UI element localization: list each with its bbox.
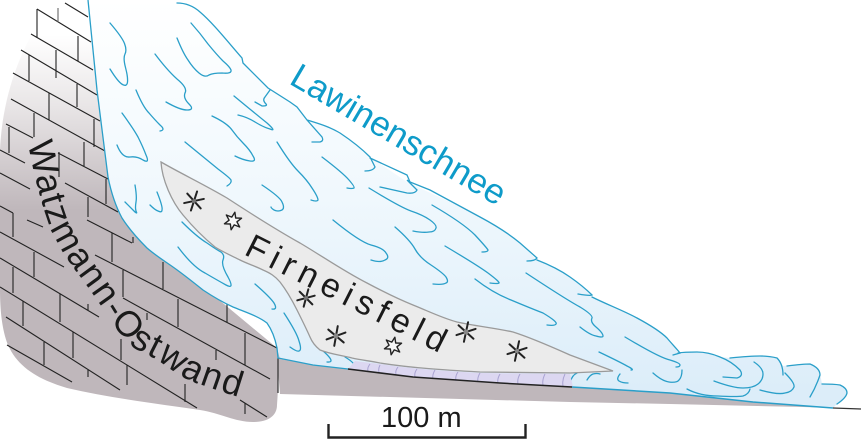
- label: Watzmann-Ostwand: Watzmann-Ostwand: [29, 138, 244, 396]
- snow flow lines: [110, 23, 794, 396]
- scale bar label: 100 m: [381, 402, 462, 434]
- star 7: [506, 339, 528, 363]
- label: Firneisfeld: Firneisfeld: [239, 227, 453, 360]
- snow left outline along the rock: [88, 0, 348, 369]
- star 5: [383, 336, 403, 356]
- basal ice layer: [348, 361, 573, 387]
- brick courses: [0, 3, 277, 417]
- scale bar line: [328, 424, 526, 438]
- base of avalanche snow outline: [572, 387, 833, 408]
- distal ground line: [833, 408, 861, 409]
- avalanche surface outline strokes: [177, 3, 847, 404]
- rock body: [0, 0, 280, 422]
- ground wedge below the snow: [277, 358, 833, 408]
- rock wall: Watzmann-Ostwand: [0, 0, 280, 422]
- scale bar: [328, 402, 526, 438]
- star 3: [296, 287, 316, 309]
- star 2: [223, 211, 243, 231]
- firn ice field: [161, 162, 613, 373]
- brick joints: [9, 9, 278, 414]
- star 6: [455, 320, 477, 344]
- star 1: [183, 189, 205, 213]
- star 4: [326, 325, 346, 347]
- bedrock line below the ice: [348, 369, 572, 387]
- label: Lawinenschnee: Lawinenschnee: [284, 56, 513, 213]
- ice crystal stars: [183, 189, 528, 363]
